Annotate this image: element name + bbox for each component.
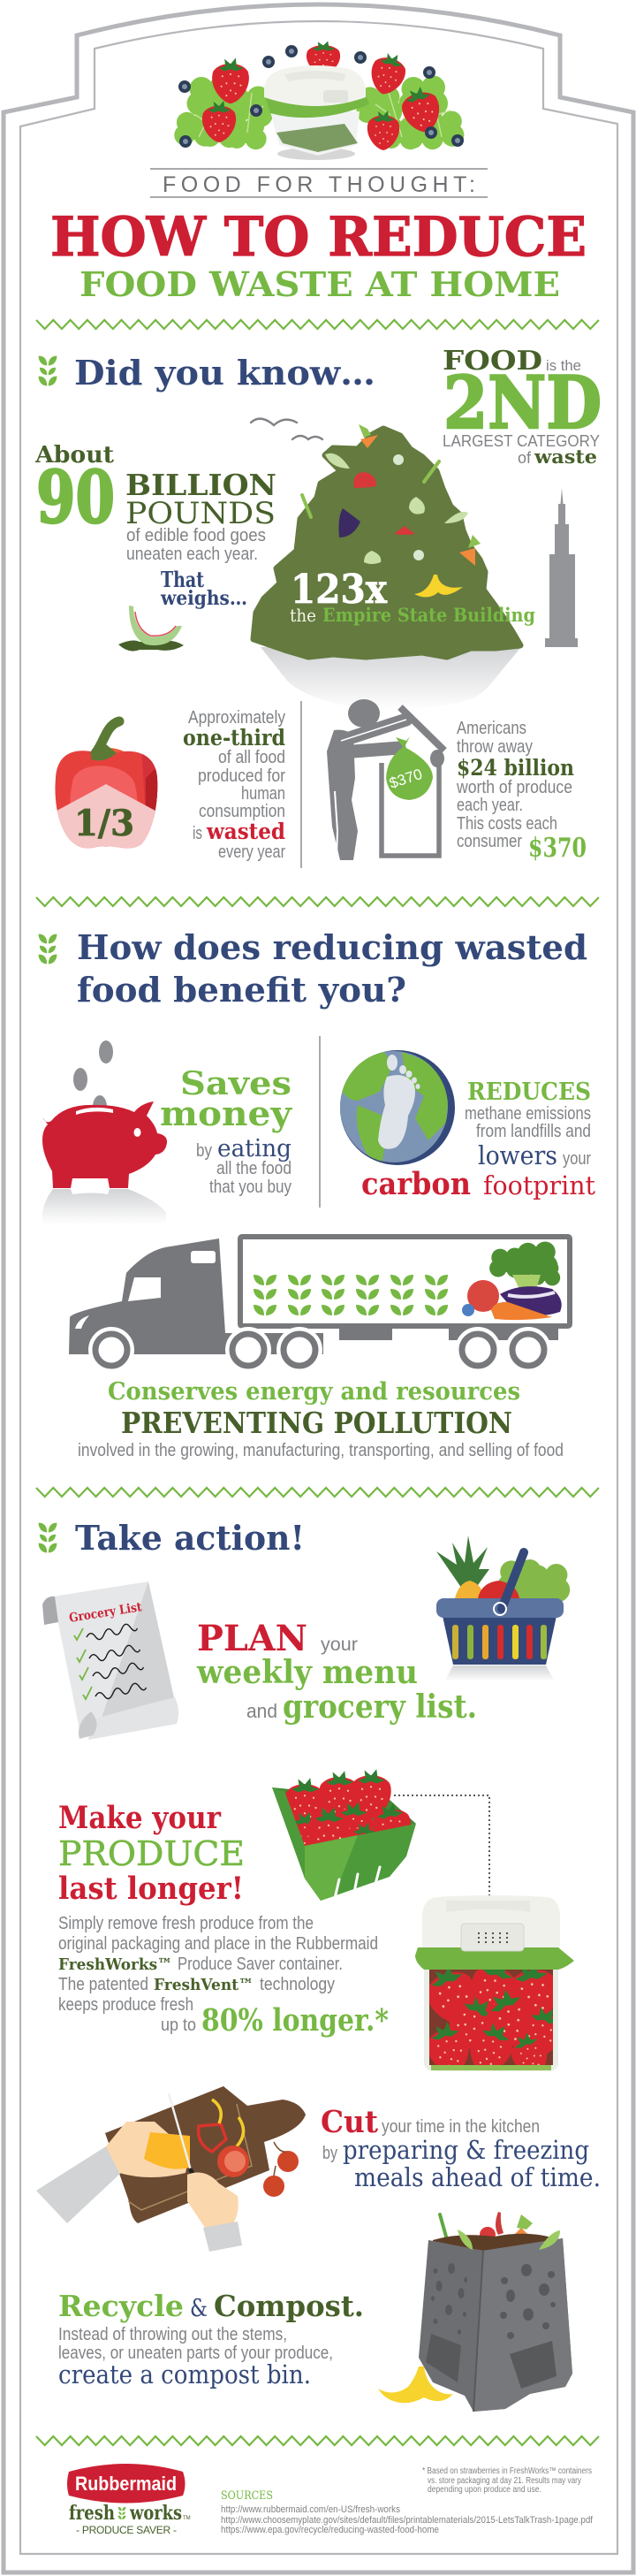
icon: watermelon rind bbox=[118, 606, 184, 652]
carrot top bbox=[359, 424, 378, 448]
green band bbox=[415, 1947, 574, 1970]
vertical divider bbox=[300, 701, 302, 868]
heading: did you know: Did you know… bbox=[74, 353, 375, 392]
slats bbox=[452, 1625, 547, 1659]
text: reduces carbon footprint: REDUCES bbox=[467, 1078, 591, 1106]
title: FOOD WASTE AT HOME bbox=[80, 264, 560, 304]
stat: 90 billion pounds: That bbox=[161, 567, 204, 592]
text: cut your time bbox=[321, 2104, 601, 2192]
logo: rubbermaid bbox=[67, 2464, 186, 2504]
chopped peppers bbox=[199, 2100, 244, 2152]
text: make your produce last longer: keeps produce fresh bbox=[58, 1995, 193, 2015]
text: plan weekly menu: your bbox=[321, 1635, 358, 1655]
text: recycle and compost: Instead of throwing out the stems, bbox=[58, 2325, 287, 2344]
heading: how does reducing wasted food benefit you bbox=[77, 927, 587, 1010]
sources: http://www.rubbermaid.com/en-US/fresh-works bbox=[221, 2504, 400, 2515]
text: recycle and compost: Recycle bbox=[58, 2289, 184, 2323]
holes bbox=[431, 2263, 556, 2339]
lettuce left bbox=[174, 76, 273, 149]
header illustration: produce saver with berries and lettuce bbox=[174, 41, 464, 160]
text: one-third wasted: Approximately bbox=[188, 708, 285, 728]
pineapple bbox=[436, 1536, 489, 1598]
icon: leaves 1 bbox=[39, 356, 57, 385]
lettuce bits bbox=[458, 2229, 560, 2250]
text: $24 billion: Americans bbox=[457, 719, 526, 738]
eggplant bbox=[339, 508, 360, 537]
footnote: * Based on strawberries in FreshWorks™ containers bbox=[422, 2466, 592, 2476]
text: make your produce last longer bbox=[58, 1800, 389, 2039]
text: $24 billion: consumer bbox=[457, 832, 522, 851]
divider zigzag 1 bbox=[36, 320, 599, 329]
text: $24 billion: $24 billion bbox=[457, 755, 574, 781]
stat: 90 billion pounds: uneaten each year. bbox=[126, 545, 258, 564]
tomatoes bbox=[353, 472, 415, 535]
lettuce veins bbox=[196, 93, 450, 137]
pepper block bbox=[144, 2132, 190, 2169]
trailer bbox=[240, 1237, 570, 1326]
text: recycle and compost: Compost. bbox=[214, 2289, 364, 2323]
lettuce right bbox=[356, 76, 464, 149]
icon: grocery list scroll bbox=[42, 1581, 178, 1740]
text: one-third wasted: every year bbox=[218, 842, 285, 862]
text: make your produce last longer: Produce Saver container. bbox=[178, 1955, 343, 1974]
text: saves money: money bbox=[160, 1094, 292, 1133]
header rules bbox=[150, 168, 488, 198]
heading: take action: Take action! bbox=[75, 1518, 305, 1558]
text: recycle and compost bbox=[58, 2289, 364, 2389]
text: conserves energy, preventing pollution: PREVENTING POLLUTION bbox=[121, 1406, 512, 1440]
text: conserves energy, preventing pollution: Conserves energy and resources bbox=[108, 1378, 520, 1406]
text: make your produce last longer: technology bbox=[260, 1975, 335, 1994]
icon: person throwing bag in bin bbox=[327, 699, 444, 860]
leaf grid bbox=[254, 1275, 448, 1315]
strawberries bbox=[202, 41, 445, 150]
tomato half bbox=[217, 2145, 249, 2177]
text: make your produce last longer: last longer! bbox=[58, 1871, 244, 1907]
right sleeve bbox=[203, 2222, 242, 2252]
text: saves money bbox=[160, 1065, 292, 1197]
logo: fresh works produce saver: works bbox=[129, 2502, 182, 2525]
text: one-third wasted: produced for bbox=[198, 766, 285, 786]
logo: fresh works produce saver bbox=[69, 2502, 191, 2536]
cab bbox=[69, 1238, 323, 1354]
heading: how does reducing wasted food benefit you: food benefit you? bbox=[77, 970, 406, 1010]
door panels bbox=[426, 2334, 556, 2389]
lid bbox=[422, 1895, 560, 1949]
text: make your produce last longer: FreshWorks™ bbox=[58, 1955, 172, 1974]
left hand bbox=[106, 2122, 190, 2177]
rim bbox=[436, 1598, 564, 1618]
icon: hands chopping on cutting board bbox=[36, 2086, 306, 2252]
vegetable scraps bbox=[440, 2212, 533, 2243]
wheels bbox=[90, 1329, 549, 1371]
container bbox=[264, 65, 369, 160]
text: one-third wasted: wasted bbox=[206, 819, 285, 844]
right hand bbox=[187, 2173, 238, 2228]
mountain caption: the bbox=[290, 605, 316, 626]
icon: bell pepper one third: 1/3 bbox=[74, 803, 134, 844]
text: saves money: Saves bbox=[180, 1065, 292, 1102]
heading: how does reducing wasted food benefit you: How does reducing wasted bbox=[77, 927, 587, 967]
left sleeve bbox=[36, 2146, 122, 2223]
icon: globe with footprint bbox=[340, 1050, 455, 1167]
lettuce bbox=[497, 1559, 570, 1606]
stat: 90 billion pounds bbox=[34, 442, 276, 610]
text: plan weekly menu bbox=[196, 1618, 477, 1726]
stat: 90 billion pounds: of edible food goes bbox=[126, 526, 266, 545]
text: $24 billion: throw away bbox=[457, 737, 533, 757]
blueberries bbox=[178, 45, 464, 148]
stat: 90 billion pounds: BILLION bbox=[125, 468, 276, 502]
stat: 90 billion pounds: weighs… bbox=[160, 587, 247, 610]
icon: birds bbox=[251, 419, 322, 439]
icon: leaves 3 bbox=[39, 1523, 57, 1552]
sources: http://www.choosemyplate.gov/sites/default/files/printablematerials/2015-LetsTalkTrash-1page.pdf bbox=[221, 2515, 594, 2526]
footnote: vs. store packaging at day 21. Results may vary bbox=[428, 2476, 581, 2486]
stat: 90 billion pounds: About bbox=[34, 442, 114, 469]
text: $24 billion bbox=[456, 719, 587, 864]
text: make your produce last longer: PRODUCE bbox=[58, 1834, 245, 1873]
trailer undercarriage bbox=[339, 1328, 558, 1340]
text: one-third wasted: is bbox=[193, 824, 202, 843]
text: cut your time: meals ahead of time. bbox=[354, 2162, 601, 2192]
asparagus bbox=[302, 461, 439, 517]
icon: delivery truck with vegetables bbox=[69, 1237, 570, 1371]
text: saves money: eating bbox=[217, 1135, 292, 1162]
vent tab bbox=[461, 1924, 524, 1951]
bin body bbox=[419, 2238, 572, 2412]
handle bbox=[502, 1552, 524, 1609]
icon: piggy bank with coins bbox=[42, 1040, 167, 1224]
vegetables in trailer bbox=[462, 1241, 562, 1320]
logo: rubbermaid: Rubbermaid bbox=[75, 2473, 177, 2495]
text: reduces carbon footprint: your bbox=[563, 1149, 591, 1169]
text: saves money: by bbox=[196, 1141, 212, 1161]
footnote bbox=[422, 2466, 592, 2495]
text: recycle and compost: create a compost bin. bbox=[58, 2359, 311, 2389]
stat: food is the 2nd largest category of waste bbox=[443, 346, 602, 468]
basket body bbox=[443, 1616, 556, 1665]
text: reduces carbon footprint: carbon bbox=[361, 1166, 471, 1202]
icon: compost bin bbox=[378, 2212, 572, 2412]
text: reduces carbon footprint: footprint bbox=[483, 1170, 595, 1200]
stat: food is the 2nd largest category of waste: of bbox=[518, 449, 532, 467]
dotted connector bbox=[394, 1795, 489, 1911]
icon: berry basket bbox=[272, 1769, 416, 1902]
text: cut your time: Cut bbox=[321, 2104, 378, 2140]
text: make your produce last longer: up to bbox=[161, 2016, 196, 2035]
vertical divider 2 bbox=[319, 1036, 321, 1208]
knife bbox=[169, 2093, 191, 2170]
title bbox=[50, 206, 587, 304]
text: saves money: all the food bbox=[216, 1159, 292, 1178]
text: one-third wasted: one-third bbox=[183, 725, 285, 751]
stat: food is the 2nd largest category of waste: is the bbox=[546, 357, 581, 374]
text: one-third wasted bbox=[183, 708, 285, 862]
title: HOW TO REDUCE bbox=[50, 206, 587, 269]
stat: 90 billion pounds: 90 bbox=[36, 456, 115, 540]
logo: fresh works produce saver: fresh bbox=[69, 2502, 115, 2525]
board bbox=[105, 2086, 306, 2223]
logo: fresh works produce saver: TM bbox=[183, 2516, 191, 2521]
text: plan weekly menu: PLAN bbox=[197, 1618, 307, 1659]
lettuce pieces bbox=[325, 453, 468, 564]
text: one-third wasted: human bbox=[241, 784, 285, 804]
text: $24 billion: each year. bbox=[457, 796, 523, 815]
text: make your produce last longer: FreshVent™ bbox=[154, 1976, 254, 1994]
stat: food is the 2nd largest category of waste: FOOD bbox=[443, 346, 542, 377]
text: conserves energy, preventing pollution: involved in the growing, manufacturing, transporting, and selling of food bbox=[78, 1441, 564, 1460]
text: make your produce last longer: 80% longer.* bbox=[201, 2002, 389, 2039]
text: reduces carbon footprint: lowers bbox=[478, 1140, 557, 1170]
text: make your produce last longer: original packaging and place in the Rubbermaid bbox=[58, 1934, 378, 1954]
text: $24 billion: This costs each bbox=[457, 814, 557, 834]
sources: https://www.epa.gov/recycle/reducing-wasted-food-home bbox=[221, 2525, 439, 2535]
text: make your produce last longer: The patented bbox=[58, 1975, 148, 1994]
logo: fresh works produce saver: - PRODUCE SAVER - bbox=[76, 2524, 177, 2536]
text: saves money: that you buy bbox=[209, 1177, 292, 1197]
text: $24 billion: $370 bbox=[528, 833, 587, 864]
icon: shopping basket bbox=[436, 1536, 570, 1681]
food waste mountain bbox=[254, 424, 535, 657]
text: one-third wasted: consumption bbox=[199, 802, 285, 821]
text: recycle and compost: leaves, or uneaten parts of your produce, bbox=[58, 2344, 333, 2363]
stat: food is the 2nd largest category of waste: waste bbox=[534, 446, 597, 468]
divider zigzag 4 bbox=[36, 2436, 599, 2445]
divider zigzag 3 bbox=[36, 1488, 599, 1497]
cherry tomatoes bbox=[263, 2142, 299, 2197]
stat: food is the 2nd largest category of waste: LARGEST CATEGORY bbox=[443, 432, 600, 450]
divider zigzag 2 bbox=[36, 897, 599, 906]
text: reduces carbon footprint: from landfills and bbox=[476, 1122, 591, 1141]
carrot right bbox=[459, 535, 481, 566]
banana peel bbox=[414, 575, 463, 598]
text: make your produce last longer: Make your bbox=[58, 1800, 221, 1836]
text: plan weekly menu: and bbox=[246, 1700, 277, 1722]
icon: produce saver with strawberries bbox=[415, 1895, 574, 2082]
pepper bbox=[478, 1581, 519, 1598]
subtitle: FOOD FOR THOUGHT: bbox=[163, 172, 475, 197]
text: reduces carbon footprint bbox=[361, 1078, 595, 1202]
mountain shadow bbox=[261, 647, 521, 711]
text: one-third wasted: of all food bbox=[218, 748, 285, 767]
pale ovals bbox=[393, 454, 424, 560]
dirt bbox=[433, 2234, 560, 2251]
text: cut your time: your time in the kitchen bbox=[382, 2117, 540, 2137]
stat: 90 billion pounds: POUNDS bbox=[125, 496, 276, 531]
text: $24 billion: worth of produce bbox=[456, 778, 572, 797]
text: make your produce last longer: Simply remove fresh produce from the bbox=[58, 1914, 314, 1933]
text: cut your time: preparing & freezing bbox=[343, 2135, 589, 2165]
text: conserves energy, preventing pollution bbox=[78, 1378, 564, 1460]
mountain caption: 123x bbox=[291, 566, 388, 613]
icon: bell pepper one third bbox=[55, 716, 157, 849]
banana peel bbox=[378, 2366, 453, 2403]
text: reduces carbon footprint: methane emissions bbox=[465, 1104, 591, 1124]
sources bbox=[221, 2489, 594, 2535]
icon: leaves 2 bbox=[39, 934, 57, 964]
stat: food is the 2nd largest category of waste: 2ND bbox=[443, 362, 602, 446]
text: cut your time: by bbox=[322, 2144, 337, 2163]
text: plan weekly menu: grocery list. bbox=[283, 1688, 477, 1726]
sources: SOURCES bbox=[221, 2489, 273, 2503]
mountain caption bbox=[290, 566, 535, 626]
icon: grocery list scroll: Grocery List bbox=[68, 1600, 143, 1626]
footnote: depending upon produce and use. bbox=[428, 2485, 541, 2495]
text: recycle and compost: & bbox=[190, 2295, 208, 2322]
mountain caption: Empire State Building bbox=[322, 604, 535, 626]
icon: person throwing bag in bin: $370 bbox=[387, 766, 424, 792]
coins bbox=[73, 1040, 113, 1118]
text: plan weekly menu: weekly menu bbox=[196, 1654, 418, 1691]
icon: empire state building bbox=[545, 488, 578, 647]
